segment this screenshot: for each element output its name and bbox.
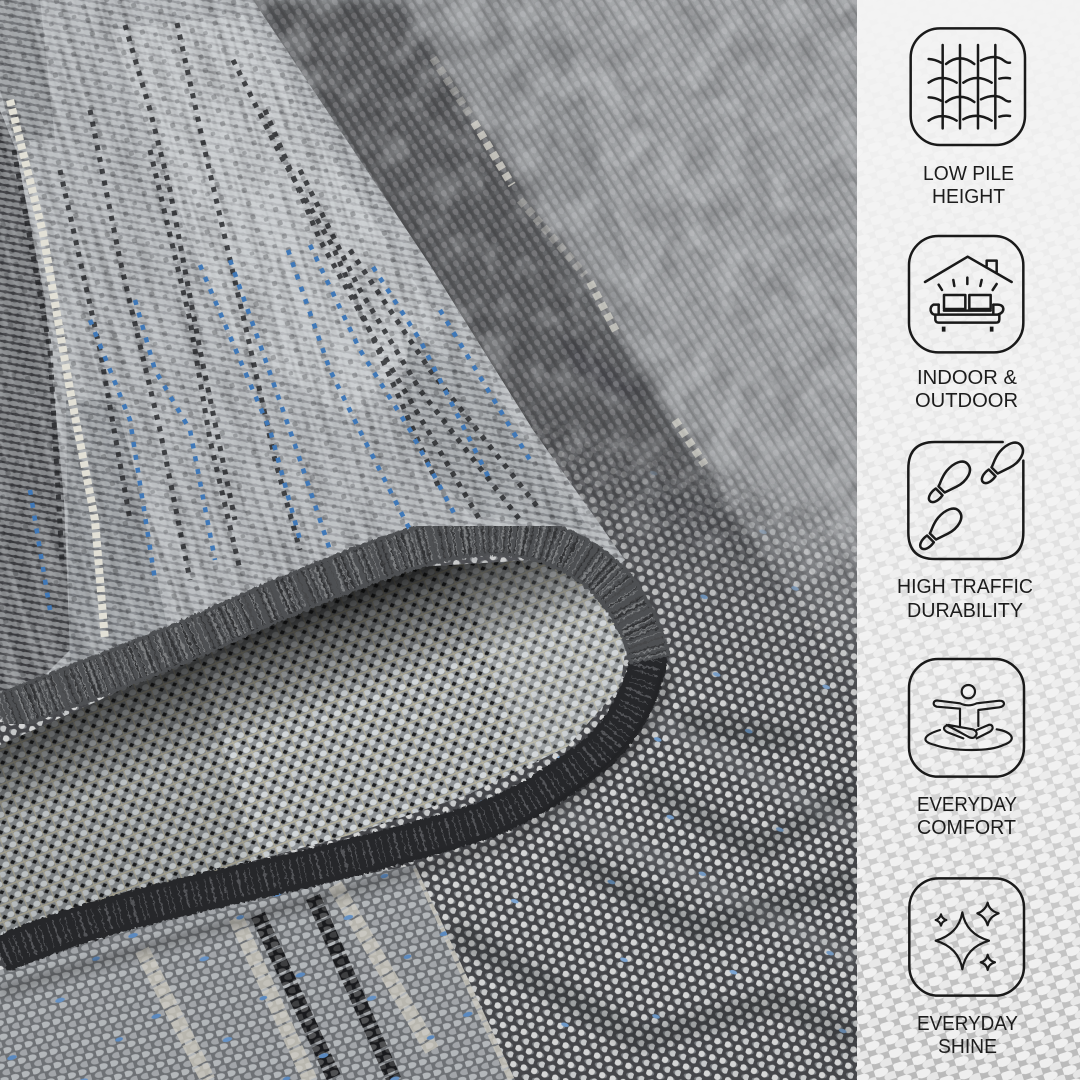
label: COMFORT [917,817,1016,839]
label: OUTDOOR [915,390,1018,412]
icon: house with sofa [909,236,1023,352]
dark bands [258,897,394,1080]
flap dark stitched stripes [14,23,540,580]
flap cream stitched stripe [10,100,105,640]
right feature panel [857,0,1080,1080]
label [897,576,1033,622]
rolled underside of rug [0,550,640,950]
label: LOW PILE [923,163,1014,185]
feature: high traffic durability [897,438,1033,622]
bottom left rug panel [0,865,515,1080]
icon: seated figure [909,659,1024,777]
flap streak texture [0,0,624,690]
lower binding [0,650,650,955]
feature: everyday shine [909,878,1024,1058]
upper binding [0,535,650,715]
flap dark left stripe [0,110,70,720]
label: DURABILITY [907,600,1023,622]
label: EVERYDAY [917,1013,1018,1035]
label [915,367,1018,412]
feature: everyday comfort [909,659,1024,839]
label [923,163,1014,208]
floor cream line [433,58,838,665]
icon: sparkles [909,878,1024,996]
label [917,794,1017,839]
feature: low pile height [911,28,1025,208]
feature: indoor and outdoor [909,236,1023,412]
label: HIGH TRAFFIC [897,576,1033,598]
label: SHINE [938,1036,997,1058]
cream bands [142,866,516,1080]
label: HEIGHT [932,186,1005,208]
roll shadow on floor [0,670,670,992]
lower grey fibre bands [540,700,857,960]
flap all-over stitches [0,0,660,730]
rug edge binding [0,535,650,955]
floor dark band [254,0,832,670]
floor rug [0,0,857,1080]
top folded rug flap [0,0,660,730]
floor lower dotted field [0,402,857,1080]
icon: pile fibres [911,28,1025,145]
lower dark patches [450,720,857,1040]
icon: footprints [908,438,1027,559]
flap tone zones [110,15,440,420]
flap blue stitched stripes [30,245,530,610]
label: EVERYDAY [917,794,1017,816]
floor light field [560,0,857,538]
label [917,1013,1018,1058]
panel weave texture [857,268,1080,1080]
floor soft weave [253,0,857,626]
label: INDOOR & [917,367,1018,389]
